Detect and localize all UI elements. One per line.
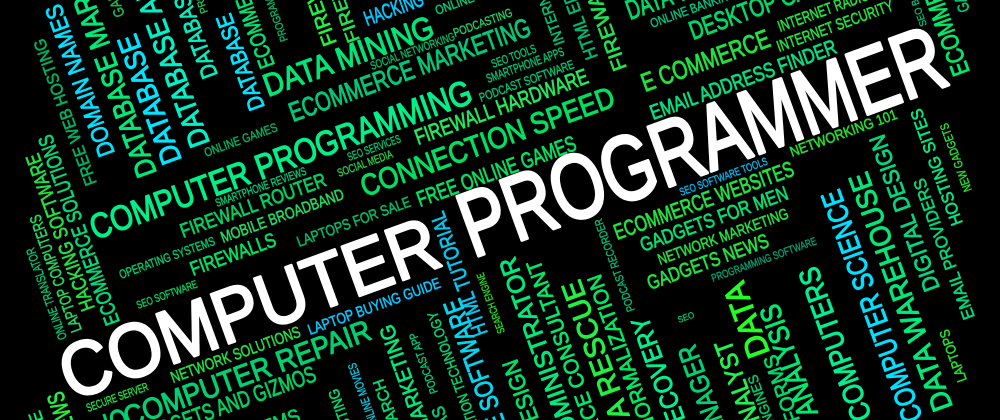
keyword: podcasting: PODCASTING	[451, 5, 514, 40]
keyword: smartphone reviews: SMARTPHONE REVIEWS	[214, 166, 308, 210]
keyword: laptop buying guide: LAPTOP BUYING GUIDE	[306, 275, 443, 339]
keyword: digital design: DIGITAL DESIGN	[864, 131, 945, 295]
keyword: search engine: SEARCH ENGINE	[475, 271, 508, 335]
keyword: social media: SOCIAL MEDIA	[336, 149, 395, 180]
keyword: computer science: COMPUTER SCIENCE	[816, 185, 930, 420]
keyword: podcast recorder: PODCAST RECORDER	[593, 217, 638, 313]
keyword: email address finder: EMAIL ADDRESS FINDER	[647, 36, 840, 125]
keyword: network marketing: NETWORK MARKETING	[656, 206, 791, 269]
keyword: online games: ONLINE GAMES	[202, 120, 279, 160]
keyword: analysis: ANALYSIS	[754, 300, 825, 420]
keyword: new gadgets: NEW GADGETS	[937, 121, 975, 194]
keyword: connection speed: CONNECTION SPEED	[356, 81, 619, 204]
keyword: data warehouse: DATA WAREHOUSE	[843, 168, 960, 416]
keyword: hosting sites: HOSTING SITES	[907, 106, 967, 228]
keyword: seo software tools: SEO SOFTWARE TOOLS	[678, 156, 769, 199]
keyword: operating systems: OPERATING SYSTEMS	[117, 234, 217, 282]
keyword: database cyan: DATABASE	[112, 30, 189, 169]
keyword: podcast software: PODCAST SOFTWARE	[477, 57, 576, 105]
keyword: free web hosting: FREE WEB HOSTING	[30, 36, 101, 188]
keyword: seo software: SEO SOFTWARE	[135, 279, 199, 312]
keyword: seo services: SEO SERVICES	[346, 133, 403, 164]
keyword: data: DATA	[716, 277, 777, 363]
keyword: seo: SEO	[676, 310, 696, 325]
title word: computer: COMPUTER	[48, 201, 451, 417]
keyword: firewalls: FIREWALLS	[187, 229, 279, 281]
keyword: hacking software: HACKING SOFTWARE	[22, 150, 100, 314]
keyword: network solutions: NETWORK SOLUTIONS	[169, 324, 303, 387]
keyword: programming software: PROGRAMMING SOFTWARE	[710, 236, 818, 285]
keyword: email providers: EMAIL PROVIDERS	[910, 176, 979, 322]
keyword: podcast app: PODCAST APP	[408, 331, 441, 395]
keyword: gadgets for men: GADGETS FOR MEN	[637, 183, 791, 257]
keyword: seo tools: SEO TOOLS	[489, 42, 538, 71]
keyword: ecommerce solutions: ECOMMERCE SOLUTIONS	[34, 131, 125, 328]
keyword: laptop computers: LAPTOP COMPUTERS	[27, 212, 86, 334]
keyword: free online games: FREE ONLINE GAMES	[413, 131, 580, 212]
keyword: ecommerce websites: ECOMMERCE WEBSITES	[610, 156, 797, 245]
keyword: gadgets news: GADGETS NEWS	[644, 230, 772, 295]
keyword: html tutorial: HTML TUTORIAL	[426, 208, 493, 339]
keyword: computers: COMPUTERS	[793, 262, 879, 420]
keyword: secure server: SECURE SERVER	[85, 381, 150, 415]
keyword: social networking: SOCIAL NETWORKING	[369, 31, 457, 73]
keyword: firewall router: FIREWALL ROUTER	[177, 169, 329, 243]
keyword: e commerce: E COMMERCE	[637, 23, 774, 98]
keyword: online translator: ONLINE TRANSLATOR	[23, 246, 70, 342]
keyword: smartphone apps: SMARTPHONE APPS	[484, 45, 566, 86]
keyword: laptops: LAPTOPS	[936, 327, 970, 384]
keyword: mobile broadband: MOBILE BROADBAND	[219, 186, 347, 247]
keyword: data mining: DATA MINING	[258, 9, 439, 104]
keyword: firewall hardware: FIREWALL HARDWARE	[411, 64, 592, 150]
keyword: laptops for sale: LAPTOPS FOR SALE	[295, 194, 413, 251]
keyword: networking 101: NETWORKING 101	[788, 107, 900, 161]
keyword: computer programming: COMPUTER PROGRAMMING	[84, 73, 477, 248]
